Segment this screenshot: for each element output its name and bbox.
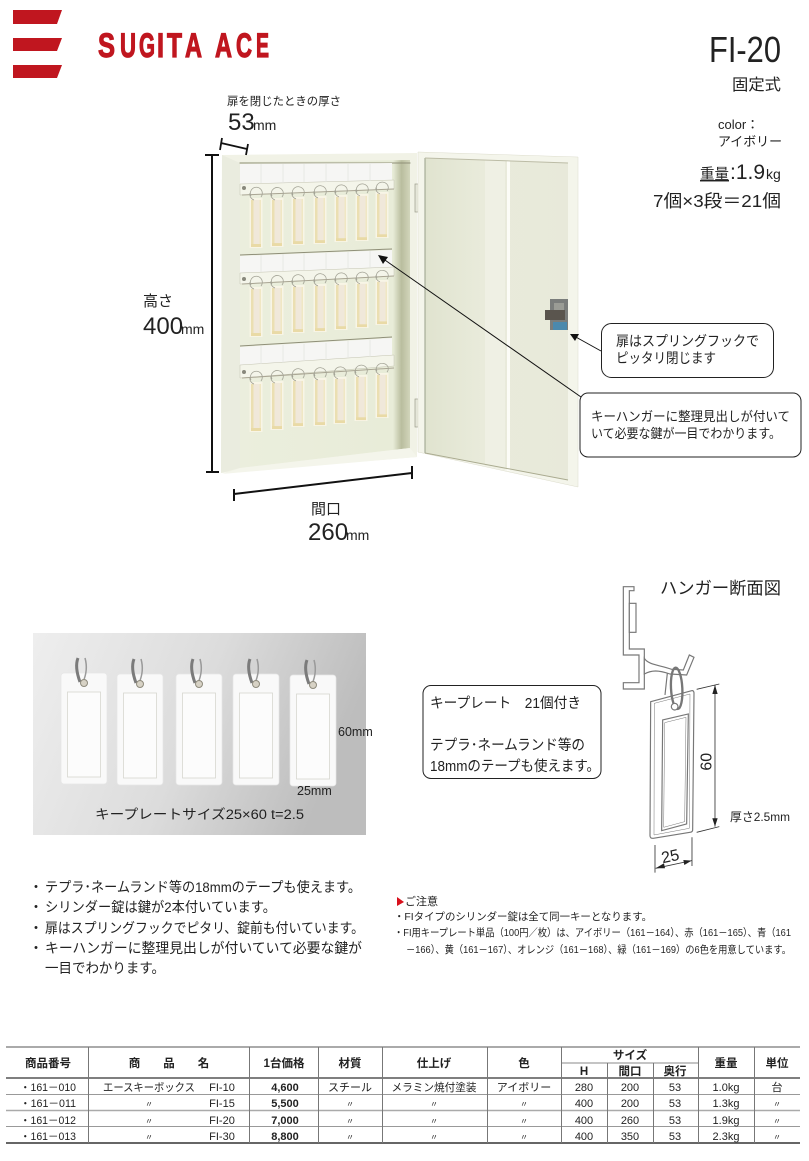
table header: 材質 xyxy=(338,1056,362,1070)
spec block: colour, weight, capacity: :1.9 xyxy=(730,161,765,184)
table row FI-10: ・161－010 xyxy=(20,1082,76,1094)
callout: key plate note: 18mmのテープも使えます。 xyxy=(430,758,600,775)
table row FI-15: FI-15 xyxy=(209,1098,235,1110)
table header: 単位 xyxy=(766,1056,789,1070)
table header: 商 品 名 xyxy=(129,1056,209,1070)
table header: 仕上げ xyxy=(417,1056,452,1070)
dimension: depth 53mm: 53 xyxy=(228,109,255,136)
table row FI-30: 〃 xyxy=(430,1133,438,1142)
model title: FI-20 xyxy=(709,29,781,70)
feature bullet list: ・ xyxy=(29,920,43,936)
brand name: I xyxy=(157,27,164,65)
dimension: width 260mm: 260 xyxy=(308,519,348,546)
table row FI-15: 53 xyxy=(669,1098,681,1110)
brand name: A xyxy=(185,27,202,65)
icon: red logo stripes xyxy=(13,10,62,78)
dimension 60 xyxy=(697,684,719,832)
table row FI-10: 4,600 xyxy=(271,1082,299,1094)
table header: 奥行 xyxy=(664,1064,687,1078)
feature bullet list: 一目でわかります。 xyxy=(45,960,165,976)
plate size caption: キープレートサイズ25×60 t=2.5 xyxy=(95,807,304,822)
table: product lineup xyxy=(6,1047,800,1143)
dimension 25: 25 xyxy=(660,847,681,867)
feature bullet list: シリンダー錠は鍵が2本付いています。 xyxy=(45,899,276,915)
callout: key plate note: テプラ･ネームランド等の xyxy=(430,736,585,754)
brand name xyxy=(98,27,269,65)
callout: spring hook xyxy=(602,324,774,378)
table row FI-30: 53 xyxy=(669,1131,681,1143)
dimension: width 260mm: 間口 xyxy=(311,501,341,518)
table row FI-20: 53 xyxy=(669,1115,681,1127)
table header: 重量 xyxy=(714,1056,738,1070)
table row FI-15: 5,500 xyxy=(271,1098,299,1110)
spec block: colour, weight, capacity: kg xyxy=(766,166,781,182)
dimension: height 400mm: 400 xyxy=(143,313,183,340)
table row FI-10: 53 xyxy=(669,1082,681,1094)
table header: 間口 xyxy=(618,1065,642,1078)
feature bullet list: 扉はスプリングフックでピタリ、錠前も付いています。 xyxy=(45,920,364,936)
key plate outline xyxy=(650,667,694,838)
panel: key plate photo xyxy=(33,633,373,835)
table row FI-10: メラミン焼付塗装 xyxy=(392,1081,476,1094)
brand name: T xyxy=(167,27,182,65)
table header: H xyxy=(580,1066,588,1078)
dimension: height 400mm: mm xyxy=(181,321,204,337)
product photo: open key cabinet xyxy=(221,152,578,487)
table row FI-20: 〃 xyxy=(520,1117,528,1126)
table row FI-30: FI-30 xyxy=(209,1131,235,1143)
dimension: height 400mm: 高さ xyxy=(143,293,173,310)
label 25mm: 25mm xyxy=(297,784,332,798)
table row FI-20: 1.9kg xyxy=(713,1115,739,1127)
table row FI-30: 400 xyxy=(575,1131,593,1143)
table row FI-15 xyxy=(20,1098,781,1110)
arrow: to hanger label xyxy=(378,255,581,397)
heading: hanger cross-section: ハンガー断面図 xyxy=(660,579,781,598)
table row FI-10: 1.0kg xyxy=(713,1082,739,1094)
table row FI-30: 350 xyxy=(621,1131,639,1143)
dimension: width 260mm xyxy=(234,466,412,546)
table row FI-30: 8,800 xyxy=(271,1131,299,1143)
table row FI-20: 〃 xyxy=(773,1117,781,1126)
brand name: C xyxy=(236,27,252,65)
table row FI-20: ・161－012 xyxy=(20,1115,76,1127)
diagram: hanger cross-section and key plate xyxy=(623,587,719,873)
hinges xyxy=(415,184,419,427)
dimension: width 260mm: mm xyxy=(346,527,369,543)
table row FI-30: 〃 xyxy=(346,1133,354,1142)
table row FI-10: 200 xyxy=(621,1082,639,1094)
table row FI-30: 〃 xyxy=(520,1133,528,1142)
feature bullet list: ・ xyxy=(29,899,43,915)
table row FI-15: 1.3kg xyxy=(713,1098,739,1110)
table row FI-30: ・161－013 xyxy=(20,1131,76,1143)
callout: spring hook: ピッタリ閉じます xyxy=(616,350,716,366)
table header: 色 xyxy=(518,1056,530,1070)
notes block: ・FIタイプのシリンダー錠は全て同一キーとなります。 xyxy=(394,910,652,923)
brand name: A xyxy=(215,27,232,65)
key hanger row 3 xyxy=(240,337,394,432)
feature bullet list: テプラ･ネームランド等の18mmのテープも使えます。 xyxy=(45,879,361,895)
label 60mm: 60mm xyxy=(338,725,373,739)
feature bullet list: キーハンガーに整理見出しが付いていて必要な鍵が xyxy=(45,940,362,956)
callout: key hanger labels xyxy=(580,393,801,457)
callout: key plate note xyxy=(423,686,601,778)
door lock xyxy=(545,299,568,330)
table row FI-15: 200 xyxy=(621,1098,639,1110)
table header: 1台価格 xyxy=(264,1056,305,1070)
table row FI-30 xyxy=(20,1131,781,1143)
key hanger row 2 xyxy=(240,249,394,337)
callout: key hanger labels: キーハンガーに整理見出しが付いて xyxy=(591,409,790,424)
brand name: S xyxy=(98,27,115,65)
table header: 商品番号 xyxy=(25,1056,71,1070)
dimension: height 400mm xyxy=(143,155,219,472)
brand name: E xyxy=(256,27,269,65)
dimension 60: 60 xyxy=(698,753,715,771)
logo: SUGITA ACE xyxy=(13,10,269,78)
table row FI-20: 260 xyxy=(621,1115,639,1127)
notes block xyxy=(394,894,791,956)
label: plate thickness: 厚さ2.5mm xyxy=(730,810,790,824)
brand name: G xyxy=(139,27,155,65)
table row FI-20: 〃 xyxy=(346,1117,354,1126)
spec block: colour, weight, capacity: 7個×3段＝21個 xyxy=(653,191,781,211)
hanger profile xyxy=(623,587,694,689)
spec block: colour, weight, capacity xyxy=(653,117,782,211)
brand name: U xyxy=(120,27,136,65)
spec block: colour, weight, capacity: color： xyxy=(718,117,759,132)
table header xyxy=(25,1048,789,1078)
table row FI-10: 280 xyxy=(575,1082,593,1094)
table row FI-15: 〃 xyxy=(145,1100,153,1109)
dimension: depth 53mm: 扉を閉じたときの厚さ xyxy=(227,95,341,108)
table row FI-30: 2.3kg xyxy=(713,1131,739,1143)
dimension: depth 53mm xyxy=(220,95,341,155)
table row FI-10: 台 xyxy=(772,1080,782,1094)
table row FI-10: FI-10 xyxy=(209,1082,235,1094)
table row FI-30: 〃 xyxy=(145,1133,153,1142)
spec block: colour, weight, capacity: アイボリー xyxy=(718,134,782,149)
feature bullet list xyxy=(29,879,364,976)
callout: spring hook: 扉はスプリングフックで xyxy=(616,333,759,349)
table row FI-30: 〃 xyxy=(773,1133,781,1142)
table row FI-10: エースキーボックス xyxy=(103,1081,195,1094)
table row FI-15: 〃 xyxy=(346,1100,354,1109)
table row FI-15: 〃 xyxy=(520,1100,528,1109)
key plates xyxy=(61,658,336,786)
table row FI-10: スチール xyxy=(328,1081,372,1094)
dimension 25 xyxy=(655,837,692,873)
table row FI-15: 400 xyxy=(575,1098,593,1110)
table row FI-15: 〃 xyxy=(430,1100,438,1109)
key hanger row 1 xyxy=(240,163,394,248)
table row FI-10 xyxy=(20,1080,782,1094)
notes block: ご注意 xyxy=(405,894,438,908)
table row FI-15: 〃 xyxy=(773,1100,781,1109)
arrow: to door edge xyxy=(570,334,601,351)
icon: red triangle xyxy=(397,897,404,906)
open door xyxy=(418,152,578,487)
table header: サイズ xyxy=(613,1048,648,1062)
table row FI-20 xyxy=(20,1115,781,1127)
table row FI-10: アイボリー xyxy=(497,1081,551,1094)
table row FI-20: 400 xyxy=(575,1115,593,1127)
callout: key plate note: キープレート 21個付き xyxy=(430,695,581,712)
table row FI-20: 〃 xyxy=(145,1117,153,1126)
table row FI-20: 〃 xyxy=(430,1117,438,1126)
table row FI-15: ・161－011 xyxy=(20,1098,76,1110)
feature bullet list: ・ xyxy=(29,940,43,956)
mount type: 固定式 xyxy=(732,76,781,94)
callout: key hanger labels: いて必要な鍵が一目でわかります。 xyxy=(591,426,781,441)
cabinet body xyxy=(221,153,417,474)
spec block: colour, weight, capacity: 重量 xyxy=(700,166,729,183)
dimension: depth 53mm: mm xyxy=(253,117,276,133)
table row FI-20: 7,000 xyxy=(271,1115,299,1127)
table row FI-20: FI-20 xyxy=(209,1115,235,1127)
feature bullet list: ・ xyxy=(29,879,43,895)
